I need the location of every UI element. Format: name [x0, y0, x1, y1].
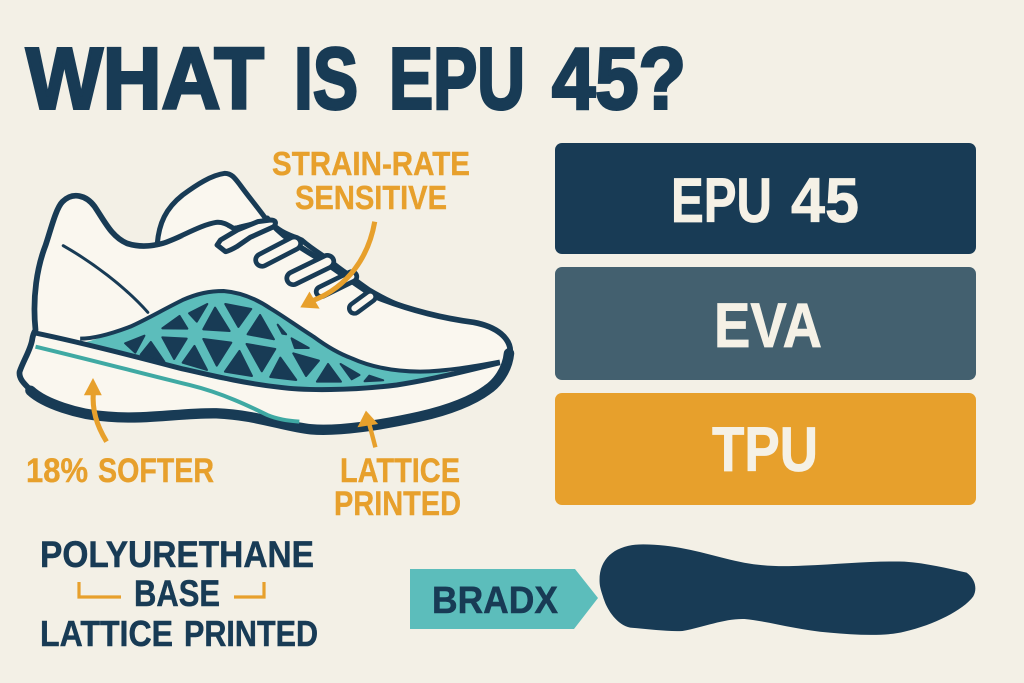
- bar: EVA: [555, 267, 976, 380]
- shoe upper and sole outline: [19, 196, 510, 430]
- text block: polyurethane base lattice printed: BASE: [134, 573, 220, 614]
- label: 18% softer: 18%: [26, 452, 88, 490]
- label: strain-rate sensitive: [272, 145, 470, 216]
- label: 18% softer: SOFTER: [98, 452, 214, 490]
- bracket right: [234, 582, 264, 597]
- midsole top line: [34, 333, 500, 390]
- label: lattice printed: PRINTED: [334, 485, 461, 523]
- label: lattice printed: LATTICE: [340, 452, 460, 490]
- lattice triangles: [125, 304, 383, 382]
- bar: TPU: TPU: [712, 415, 818, 485]
- arrow: strain-rate: [300, 222, 375, 309]
- teal sole line: [36, 347, 299, 422]
- label: strain-rate sensitive: STRAIN-RATE: [272, 145, 470, 182]
- outsole thick band: [30, 353, 509, 430]
- bar: TPU: [555, 393, 976, 505]
- title: WHAT: [26, 30, 264, 128]
- label: strain-rate sensitive: SENSITIVE: [295, 179, 447, 216]
- laces: [217, 220, 370, 308]
- text block: polyurethane base lattice printed: [40, 534, 318, 654]
- shoe tongue: [157, 173, 265, 244]
- bar: EVA: EVA: [714, 291, 822, 361]
- lattice midsole insert: [80, 291, 500, 391]
- heel seam: [63, 246, 148, 312]
- title: IS: [294, 30, 358, 128]
- title: 45?: [552, 30, 686, 128]
- text block: polyurethane base lattice printed: PRINTED: [184, 613, 318, 654]
- collar redraw: [127, 222, 237, 246]
- title: [26, 30, 686, 128]
- comparison bars: [555, 143, 976, 505]
- title: EPU: [389, 30, 525, 128]
- lattice outline: [80, 291, 500, 372]
- label: 18% softer: [26, 452, 214, 490]
- bracket left: [79, 582, 121, 597]
- illustration: running shoe: [19, 173, 510, 447]
- arrow: lattice printed: [357, 411, 378, 447]
- arrow: softer: [84, 378, 107, 442]
- bar: EPU 45: EPU: [671, 166, 772, 236]
- tag: BRADX: BRADX: [432, 580, 559, 622]
- bar: EPU 45: [555, 143, 976, 254]
- eyestay line: [268, 220, 403, 307]
- outsole silhouette: [600, 544, 975, 635]
- text block: polyurethane base lattice printed: LATTICE: [40, 613, 173, 654]
- tag: BRADX: [410, 569, 598, 629]
- bar: EPU 45: 45: [791, 166, 859, 236]
- label: lattice printed: [334, 452, 461, 523]
- text block: polyurethane base lattice printed: POLYURETHANE: [40, 534, 314, 575]
